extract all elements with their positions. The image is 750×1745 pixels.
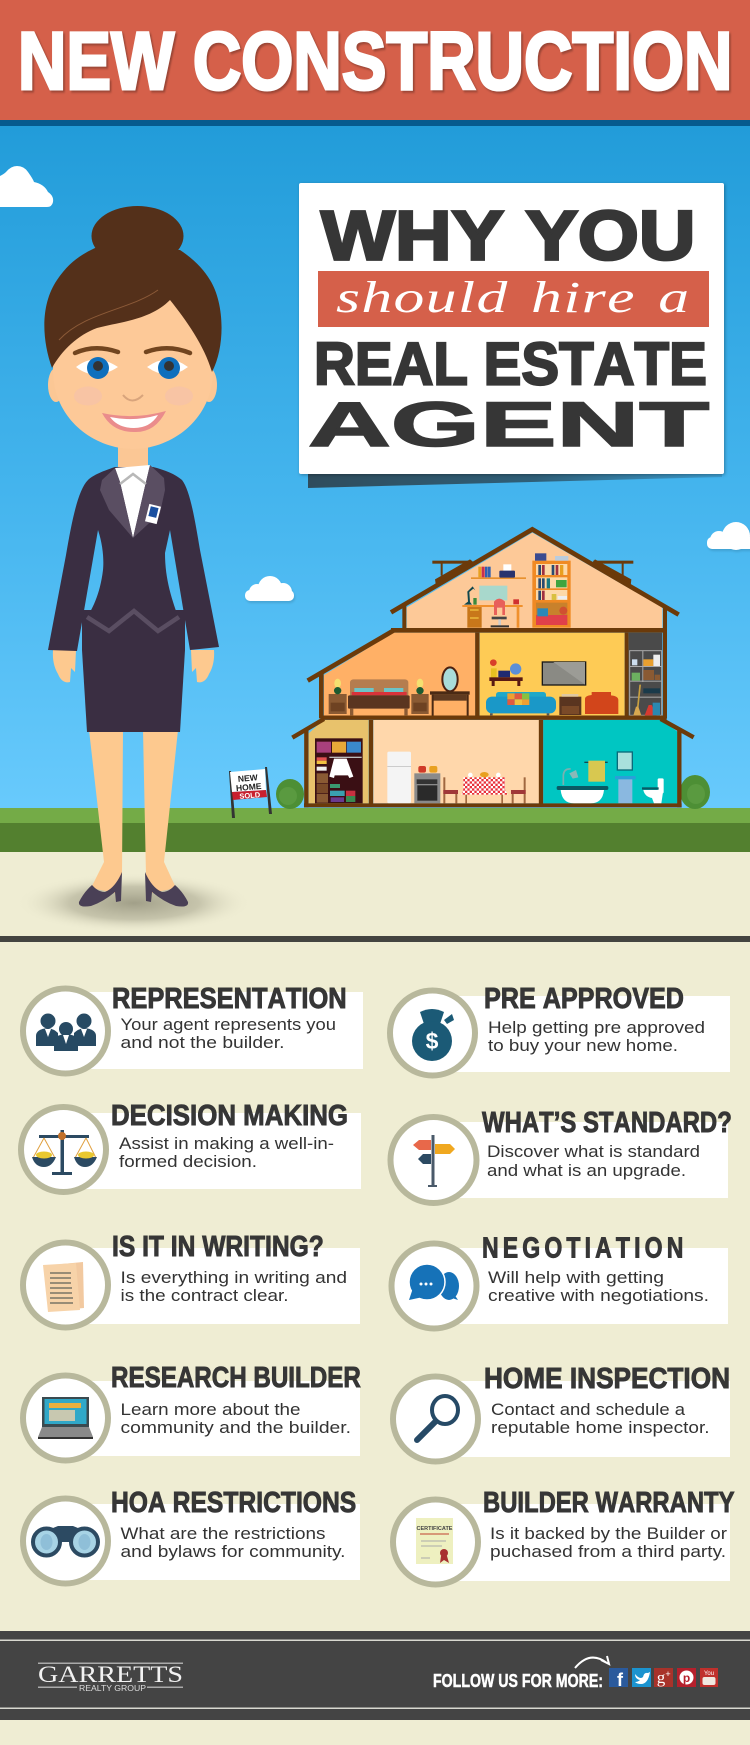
icon: youtube: You [704, 1671, 714, 1677]
logo: garretts [38, 1662, 183, 1693]
description [488, 1018, 705, 1055]
cloud: middle [245, 576, 294, 601]
for-sale sign: HOME [236, 781, 262, 793]
icon: signpost [413, 1135, 455, 1187]
icon: scales [32, 1130, 97, 1175]
bushes [276, 775, 710, 809]
icon: chat bubbles [409, 1264, 459, 1300]
ring [393, 1500, 478, 1584]
description: community and the builder. [120, 1418, 351, 1437]
description [490, 1524, 727, 1561]
lapels [100, 465, 165, 538]
skirt [82, 610, 185, 732]
heading: HOA RESTRICTIONS [111, 1486, 356, 1518]
description: Will help with getting [488, 1268, 664, 1287]
icon: money bag: $ [426, 1028, 439, 1054]
description: puchased from a third party. [490, 1542, 726, 1561]
icon: people [36, 1014, 96, 1051]
for-sale sign: SOLD [239, 790, 261, 801]
nose [123, 395, 143, 400]
neck [118, 440, 148, 475]
hands [53, 650, 214, 682]
hair bun [92, 206, 184, 266]
cloud: right [707, 522, 750, 550]
collar detail [120, 474, 146, 484]
ring [390, 990, 475, 1076]
heading: real estate: REAL ESTATE [314, 331, 707, 398]
icon: certificate: CERTIFICATE [417, 1526, 453, 1532]
description [120, 1524, 346, 1561]
ring [390, 1117, 476, 1203]
heading: BUILDER WARRANTY [483, 1486, 735, 1519]
description: to buy your new home. [488, 1036, 678, 1055]
item: research builder [23, 1361, 361, 1460]
icon: facebook [609, 1668, 628, 1690]
description: is the contract clear. [120, 1286, 288, 1305]
ring [21, 1107, 106, 1192]
footer band [0, 1631, 750, 1720]
heading: NEGOTIATION [482, 1231, 688, 1264]
for-sale sign [229, 767, 272, 818]
shoes [79, 872, 188, 906]
item: negotiation [392, 1231, 728, 1328]
description: reputable home inspector. [491, 1418, 710, 1437]
heading: agent: AGENT [308, 389, 709, 460]
ears [48, 368, 217, 402]
hair [44, 248, 222, 372]
icon: twitter [632, 1668, 651, 1687]
ring [392, 1244, 476, 1328]
follow us text: FOLLOW US FOR MORE: [433, 1670, 603, 1691]
icon: facebook: f [617, 1670, 624, 1690]
icon: binoculars [33, 1526, 98, 1556]
for-sale sign: NEW [237, 772, 259, 784]
item: representation [23, 981, 363, 1074]
jacket [48, 467, 219, 651]
description: formed decision. [119, 1152, 257, 1171]
item: what's standard [390, 1106, 732, 1203]
icon: certificate [416, 1518, 453, 1564]
item: is it in writing [23, 1230, 360, 1328]
description: Your agent represents you [120, 1015, 336, 1034]
heading: why you: WHY YOU [321, 196, 695, 275]
header banner [0, 0, 750, 126]
eyebrows [75, 348, 190, 353]
storage closet [629, 633, 662, 716]
icon: pinterest: p [683, 1671, 690, 1685]
attic room [407, 533, 662, 628]
title: NEW CONSTRUCTION [18, 15, 732, 107]
icon: google plus: + [665, 1669, 671, 1679]
bathroom [543, 720, 677, 803]
grass [0, 808, 750, 852]
agent figure [44, 206, 222, 906]
item: decision making [21, 1099, 361, 1192]
living room [480, 633, 625, 716]
house illustration [292, 529, 694, 807]
left eye [76, 357, 118, 379]
cheeks [74, 386, 193, 406]
icon: google plus [654, 1668, 673, 1687]
arrow [575, 1656, 609, 1668]
logo: garretts: REALTY GROUP [79, 1683, 146, 1693]
heading: RESEARCH BUILDER [111, 1361, 361, 1394]
description: Assist in making a well-in- [119, 1134, 334, 1153]
item: builder warranty [393, 1486, 735, 1584]
description: Discover what is standard [487, 1142, 700, 1161]
description [488, 1268, 709, 1305]
title card [299, 183, 724, 488]
shirt [115, 465, 150, 538]
description: What are the restrictions [120, 1524, 326, 1543]
description: Learn more about the [120, 1400, 300, 1419]
mouth [102, 411, 166, 432]
description: Is it backed by the Builder or [490, 1524, 727, 1543]
legs [89, 730, 178, 893]
item: hoa restrictions [23, 1486, 360, 1584]
description: Contact and schedule a [491, 1400, 686, 1419]
sky [0, 126, 750, 808]
heading: HOME INSPECTION [484, 1362, 730, 1394]
description [491, 1400, 710, 1437]
card fold shadow [308, 474, 722, 488]
description [120, 1268, 347, 1305]
icon: google plus: g [657, 1668, 666, 1687]
ring [23, 1242, 108, 1328]
jacket hem zigzag [87, 611, 179, 631]
wardrobe room [309, 720, 369, 803]
logo: garretts: GARRETTS [38, 1662, 183, 1687]
face [53, 290, 213, 449]
section divider [0, 936, 750, 942]
icon: papers [43, 1262, 84, 1312]
description: Help getting pre approved [488, 1018, 705, 1037]
icon: magnifier [417, 1396, 458, 1440]
description: and not the builder. [120, 1033, 284, 1052]
heading: PRE APPROVED [484, 981, 684, 1014]
cloud: top left [0, 166, 53, 207]
item: home inspection [393, 1362, 730, 1462]
heading: WHAT’S STANDARD? [482, 1106, 732, 1139]
icon: youtube [700, 1668, 718, 1687]
description [119, 1134, 334, 1171]
heading: IS IT IN WRITING? [112, 1230, 324, 1262]
agent ground shadow [16, 873, 252, 933]
right eye [147, 357, 188, 379]
ring [393, 1376, 478, 1462]
balcony rails [432, 559, 633, 586]
heading: DECISION MAKING [111, 1099, 348, 1131]
description [120, 1400, 351, 1437]
ring [23, 1498, 108, 1584]
ring [23, 1376, 108, 1460]
item: pre approved [390, 981, 730, 1076]
description [120, 1015, 336, 1052]
description: and bylaws for community. [120, 1542, 346, 1561]
description: Is everything in writing and [120, 1268, 347, 1287]
bedroom [324, 633, 475, 716]
kitchen and dining [373, 720, 539, 803]
description: and what is an upgrade. [487, 1161, 686, 1180]
icon: laptop [38, 1397, 93, 1439]
ring [23, 988, 108, 1074]
banner: should hire a: should hire a [336, 273, 690, 322]
description [487, 1142, 700, 1180]
hair highlight [59, 290, 158, 340]
icon: money bag [412, 1009, 454, 1061]
description: creative with negotiations. [488, 1286, 709, 1305]
heading: REPRESENTATION [112, 981, 347, 1014]
icon: pinterest [677, 1668, 696, 1687]
badge [145, 504, 161, 524]
house framing [292, 529, 694, 807]
